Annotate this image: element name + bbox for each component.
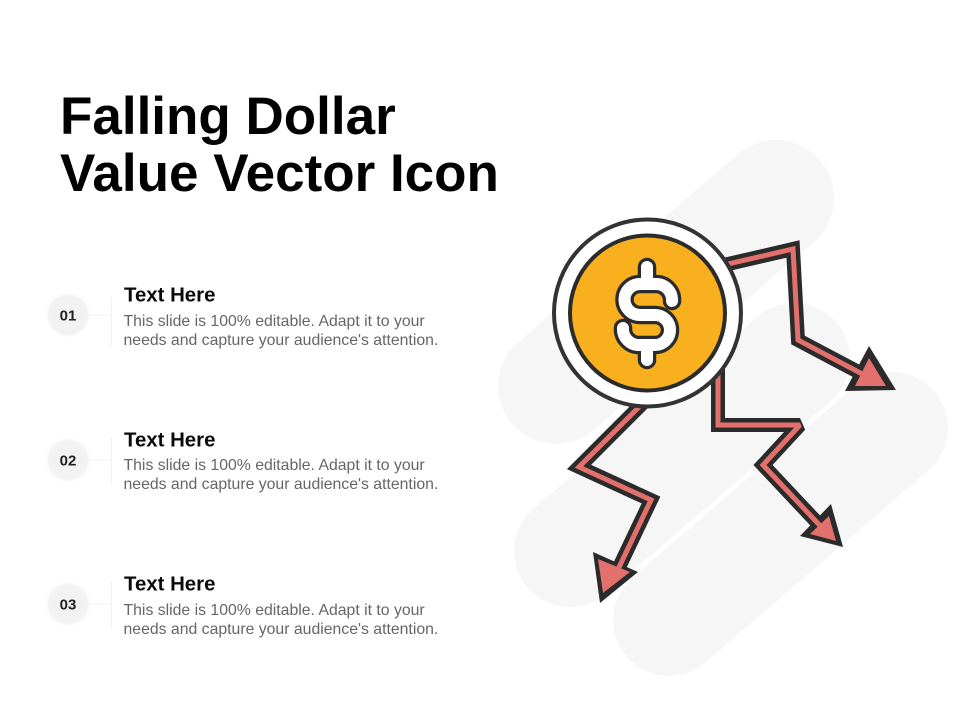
- number badge 01: 01: [60, 308, 76, 324]
- body text 03: needs and capture your audience's attention.: [124, 621, 438, 638]
- body text 01: This slide is 100% editable. Adapt it to your: [124, 313, 425, 330]
- body text 03: [124, 602, 438, 638]
- number badge 02: [48, 437, 112, 485]
- number badge 01: [48, 294, 112, 346]
- body text 01: needs and capture your audience's attention.: [124, 332, 438, 349]
- body text 03: This slide is 100% editable. Adapt it to your: [124, 602, 425, 619]
- icon: dollar sign: [623, 267, 672, 360]
- body text 02: This slide is 100% editable. Adapt it to your: [124, 457, 425, 474]
- list item 03: [48, 574, 438, 638]
- background capsules: [556, 198, 892, 620]
- arrow: middle: [718, 360, 843, 547]
- heading 01: Text Here: [124, 284, 215, 306]
- arrow: upper right: [715, 249, 896, 391]
- list item 01: [48, 284, 438, 349]
- falling dollar icon: [554, 220, 896, 603]
- arrow: lower left: [579, 396, 651, 603]
- body text 02: [124, 457, 438, 493]
- heading 02: Text Here: [124, 430, 215, 452]
- list item 02: [48, 430, 438, 493]
- title: Falling Dollar: [60, 87, 396, 146]
- title: [60, 87, 499, 203]
- icon: coin: [554, 220, 741, 406]
- body text 01: [124, 313, 438, 349]
- heading 03: Text Here: [124, 574, 215, 596]
- body text 02: needs and capture your audience's attention.: [124, 476, 438, 493]
- title: Value Vector Icon: [60, 144, 499, 203]
- number badge 02: 02: [60, 452, 76, 470]
- number badge 03: 03: [60, 596, 76, 614]
- number badge 03: [48, 581, 112, 629]
